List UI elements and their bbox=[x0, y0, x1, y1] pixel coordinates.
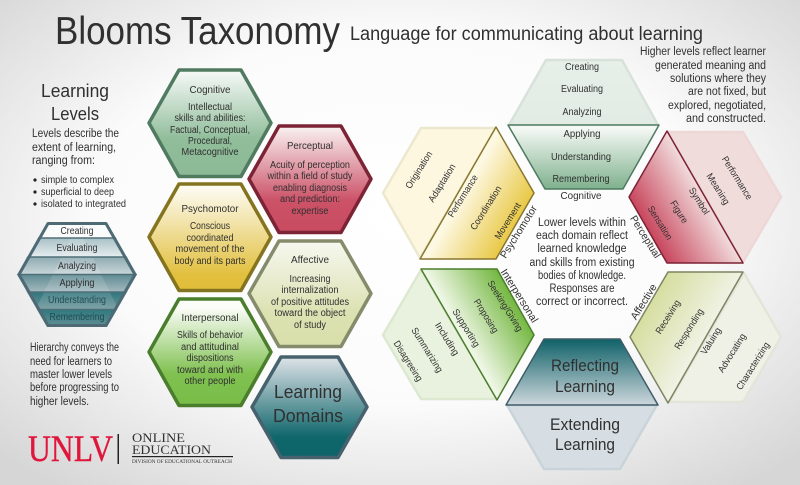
level labels: perceptual: Performance bbox=[719, 155, 754, 202]
level labels: interpersonal: Proposing bbox=[471, 297, 500, 335]
text: cognitive description: skills and abilities: bbox=[174, 113, 246, 124]
panel: interpersonal levels hexagon bbox=[383, 267, 540, 400]
level labels: psychomotor: Coordination bbox=[469, 184, 504, 232]
logo: UNLV online education: EDUCATION bbox=[132, 442, 212, 457]
level labels: affective: Valuing bbox=[699, 326, 724, 357]
reflecting learning half: Learning bbox=[555, 377, 615, 396]
level labels: Understanding bbox=[48, 295, 106, 306]
bullet list: isolated to integrated bbox=[41, 199, 126, 210]
text: hierarchy note: Hierarchy conveys the bbox=[30, 342, 119, 354]
level labels: cognitive bbox=[551, 62, 611, 185]
text: cognitive description: Intellectual bbox=[188, 102, 232, 113]
extending learning half bbox=[507, 405, 657, 469]
level labels: psychomotor: Performance bbox=[446, 173, 481, 220]
text: higher levels note: generated meaning and bbox=[655, 60, 766, 72]
text: levels description: extent of learning, bbox=[32, 142, 116, 154]
panel: reflecting and extending learning hexagon bbox=[506, 339, 658, 469]
text: levels description: Levels describe the bbox=[32, 128, 119, 140]
heading: cognitive: Cognitive bbox=[190, 84, 231, 96]
level labels: perceptual: Symbol bbox=[686, 186, 711, 217]
text: psychomotor description bbox=[174, 221, 246, 267]
level labels: cognitive: Understanding bbox=[551, 152, 611, 163]
panel: learning levels text bbox=[32, 81, 126, 210]
text: interpersonal description: Skills of behavior bbox=[177, 330, 244, 341]
text: interpersonal description: toward and with bbox=[177, 365, 243, 376]
levels hexagon bbox=[15, 220, 140, 328]
logo: UNLV online education: DIVISION OF EDUCATIONAL OUTREACH bbox=[132, 459, 232, 465]
level labels: perceptual bbox=[645, 155, 754, 242]
bullet list bbox=[33, 175, 126, 210]
level labels: interpersonal: Seeking/Giving bbox=[485, 279, 525, 334]
text: lower levels note: bodies of knowledge. bbox=[538, 270, 626, 282]
panel: learning domains label: Domains bbox=[273, 405, 343, 426]
panel: affective levels hexagon bbox=[628, 272, 781, 403]
level labels: interpersonal: Summarizing bbox=[408, 326, 445, 375]
text: affective description bbox=[271, 274, 349, 331]
heading: learning levels bbox=[41, 81, 109, 124]
level labels: interpersonal: Including bbox=[432, 321, 461, 358]
level labels: psychomotor: Movement bbox=[493, 201, 524, 242]
heading: interpersonal: Interpersonal bbox=[182, 312, 238, 324]
text: hierarchy note: higher levels. bbox=[30, 396, 89, 408]
text: lower levels note: each domain reflect bbox=[536, 230, 629, 242]
subtitle: Language for communicating about learning bbox=[350, 24, 703, 45]
level labels: affective: Receiving bbox=[654, 298, 683, 336]
text: affective description: internalization bbox=[282, 285, 338, 296]
level labels: psychomotor bbox=[404, 150, 524, 242]
panel: psychomotor domain bbox=[149, 184, 271, 290]
level labels: Analyzing bbox=[58, 261, 96, 272]
level labels: cognitive: Analyzing bbox=[562, 107, 602, 118]
text: interpersonal description bbox=[177, 330, 244, 387]
bullet list: superficial to deep bbox=[41, 187, 114, 198]
label: cognitive: Cognitive bbox=[560, 190, 602, 202]
level labels: Remembering bbox=[50, 312, 104, 323]
text: perceptual description: enabling diagnosis bbox=[273, 183, 347, 194]
label: psychomotor: Psychomotor bbox=[498, 203, 540, 261]
text: hierarchy note: before progressing to bbox=[30, 382, 119, 394]
text: higher levels note: and constructed. bbox=[686, 113, 766, 125]
text: perceptual description: and prediction: bbox=[280, 194, 340, 205]
panel: cognitive domain bbox=[149, 70, 271, 176]
level labels: Evaluating bbox=[56, 243, 98, 254]
heading: affective: Affective bbox=[291, 254, 329, 266]
extending learning half: Learning bbox=[555, 435, 615, 454]
text: higher levels note bbox=[640, 46, 767, 125]
reflecting learning half bbox=[506, 339, 658, 405]
level labels: cognitive: Remembering bbox=[552, 174, 610, 185]
text: cognitive description bbox=[170, 102, 250, 158]
text: psychomotor description: coordinated bbox=[186, 233, 234, 244]
reflecting learning half: Reflecting bbox=[551, 356, 619, 375]
heading: psychomotor: Psychomotor bbox=[182, 203, 239, 215]
level labels bbox=[48, 226, 106, 323]
text: perceptual description: within a field of study bbox=[267, 171, 352, 182]
text: higher levels note: explored, negotiated, bbox=[668, 100, 766, 112]
panel: learning domains label: Learning bbox=[274, 381, 342, 402]
text: hierarchy note bbox=[30, 342, 119, 408]
level labels: interpersonal: Supporting bbox=[450, 307, 482, 349]
logo: UNLV online education: ONLINE bbox=[132, 430, 185, 445]
panel: learning domains label bbox=[252, 357, 367, 458]
level labels: Applying bbox=[60, 278, 94, 289]
text: affective description: toward the object bbox=[274, 308, 346, 319]
extending learning half: Extending bbox=[550, 415, 620, 434]
text: lower levels note: learned knowledge bbox=[538, 243, 626, 255]
level labels: cognitive: Creating bbox=[565, 62, 599, 73]
text: lower levels note: Responses are bbox=[550, 283, 614, 295]
text: lower levels note: correct or incorrect. bbox=[536, 296, 628, 308]
text: hierarchy note: need for learners to bbox=[30, 356, 112, 368]
level labels: psychomotor: Origination bbox=[404, 150, 435, 191]
level labels: perceptual: Meaning bbox=[704, 172, 732, 207]
text: higher levels note: are not fixed, but bbox=[688, 86, 767, 98]
text: lower levels note: and skills from existing bbox=[530, 257, 634, 269]
text: psychomotor description: movement of the bbox=[176, 244, 245, 255]
text: perceptual description bbox=[267, 160, 352, 217]
panel: perceptual domain bbox=[249, 126, 371, 232]
text: cognitive description: Metacognitive bbox=[182, 147, 239, 158]
text: higher levels note: Higher levels reflect learner bbox=[640, 46, 766, 58]
text: levels description: ranging from: bbox=[32, 155, 95, 167]
level labels: affective: Advocating bbox=[716, 332, 749, 375]
text: hierarchy note: master lower levels bbox=[30, 369, 112, 381]
text: levels description bbox=[32, 128, 119, 167]
heading: learning levels: Levels bbox=[51, 104, 99, 124]
level labels: psychomotor: Adaptation bbox=[426, 162, 458, 204]
heading: perceptual: Perceptual bbox=[287, 140, 333, 152]
heading: learning levels: Learning bbox=[41, 81, 109, 101]
level labels: affective: Responding bbox=[673, 307, 706, 352]
text: psychomotor description: Conscious bbox=[190, 221, 230, 232]
text: interpersonal description: other people bbox=[184, 376, 236, 387]
level labels: perceptual: Figure bbox=[667, 199, 690, 226]
level labels: cognitive: Evaluating bbox=[561, 84, 603, 95]
logo: UNLV online education: UNLV bbox=[28, 429, 113, 470]
text: affective description: of positive attitudes bbox=[271, 297, 349, 308]
panel: perceptual levels hexagon bbox=[627, 131, 781, 263]
panel: cognitive levels hexagon bbox=[508, 60, 659, 202]
panel: affective domain bbox=[249, 241, 371, 346]
level labels: affective: Characterizing bbox=[734, 340, 772, 392]
text: perceptual description: expertise bbox=[292, 206, 329, 217]
level labels: perceptual: Sensation bbox=[645, 204, 674, 242]
level labels: Creating bbox=[60, 226, 94, 237]
level labels: interpersonal: Disagreeing bbox=[391, 339, 424, 384]
bullet list: simple to complex bbox=[41, 175, 114, 186]
label: perceptual: Perceptual bbox=[627, 213, 663, 261]
logo: UNLV online education bbox=[28, 429, 233, 470]
level labels: interpersonal bbox=[391, 279, 525, 384]
label: affective: Affective bbox=[628, 282, 660, 322]
text: lower levels note bbox=[530, 217, 634, 308]
level labels: affective bbox=[654, 298, 772, 392]
text: cognitive description: Factual, Conceptual, bbox=[170, 125, 250, 136]
text: interpersonal description: dispositions bbox=[186, 353, 234, 364]
panel: interpersonal domain bbox=[149, 299, 271, 406]
text: lower levels note: Lower levels within bbox=[538, 217, 626, 229]
text: higher levels note: solutions where they bbox=[670, 73, 766, 85]
label: interpersonal: Interpersonal bbox=[498, 267, 540, 325]
title: Blooms Taxonomy bbox=[55, 10, 340, 53]
level labels: cognitive: Applying bbox=[564, 129, 600, 140]
text: affective description: Increasing bbox=[290, 274, 330, 285]
text: affective description: of study bbox=[294, 320, 326, 331]
panel: psychomotor levels hexagon bbox=[383, 127, 540, 261]
text: psychomotor description: body and its parts bbox=[174, 256, 246, 267]
text: interpersonal description: and attitudinal bbox=[181, 342, 239, 353]
text: cognitive description: Procedural, bbox=[188, 136, 232, 147]
text: perceptual description: Acuity of perception bbox=[270, 160, 350, 171]
